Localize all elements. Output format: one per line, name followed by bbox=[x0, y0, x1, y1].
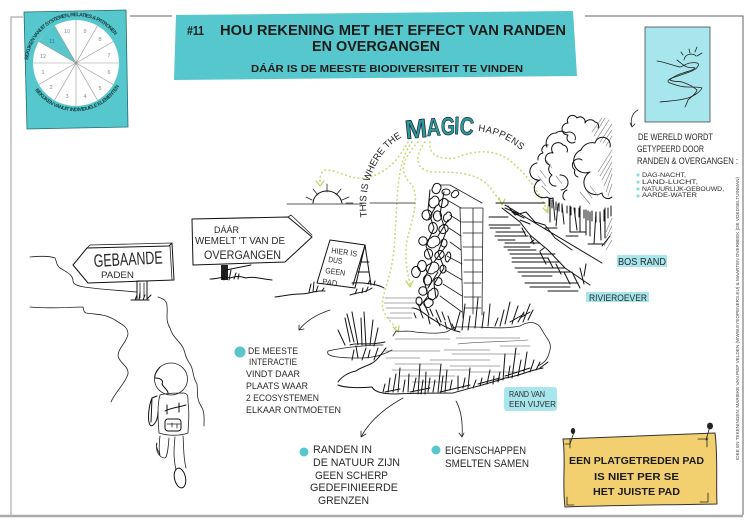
ivy leaves bbox=[412, 183, 459, 308]
label: rand van een vijver: EEN VIJVER bbox=[509, 399, 556, 409]
magic: M bbox=[404, 114, 429, 145]
credits: IDEE EN TEKENINGEN: MARIEKE VAN PIEP VELDEN (WWW.EYEOPENERS.EU) & MAARTEN OVERBEEK (DE VOEDSELTUINMAN) bbox=[735, 177, 740, 460]
arrow: to eigenschappen text bbox=[456, 401, 464, 437]
sign: gebaande paden bbox=[73, 243, 174, 300]
pond grasses bbox=[338, 348, 543, 394]
wheel numbers: 7 bbox=[107, 53, 111, 59]
text block: interactie bbox=[234, 346, 341, 415]
dotted arrows from magic bbox=[316, 142, 548, 332]
text block: interactie: ELKAAR ONTMOETEN bbox=[246, 405, 341, 415]
wheel numbers bbox=[40, 29, 111, 100]
sign: daar wemelt het: OVERGANGEN bbox=[204, 248, 281, 262]
sign: hier is dus geen pad: DUS bbox=[328, 255, 343, 266]
panel: title banner: HOU REKENING MET HET EFFECT VAN RANDEN bbox=[220, 23, 566, 39]
hatching bbox=[592, 118, 612, 250]
wheel numbers: 9 bbox=[83, 29, 87, 35]
magic: I bbox=[454, 112, 460, 140]
labels on landscape bbox=[504, 255, 667, 411]
wheel numbers: 5 bbox=[98, 86, 102, 92]
wheel numbers: 8 bbox=[98, 37, 102, 43]
panel: wheel of principles: BEKIJKEN VANUIT INDIVIDUELE ELEMENTEN bbox=[35, 84, 119, 112]
text block: interactie: PLAATS WAAR bbox=[246, 381, 308, 391]
heading: #11 bbox=[187, 23, 204, 38]
wheel numbers: 2 bbox=[49, 85, 53, 91]
wheel numbers: 11 bbox=[49, 39, 55, 45]
wheel numbers: 10 bbox=[64, 29, 70, 35]
text block: interactie: INTERACTIE bbox=[249, 357, 297, 367]
wheel numbers: 1 bbox=[41, 70, 45, 76]
text: de wereld wordt bbox=[636, 132, 738, 199]
text block: eigenschappen bbox=[432, 445, 529, 470]
wheel numbers: 4 bbox=[83, 94, 87, 100]
magic heading bbox=[360, 112, 524, 218]
text block: interactie: DE MEESTE bbox=[248, 346, 298, 356]
text block: eigenschappen: EIGENSCHAPPEN bbox=[445, 445, 526, 457]
callout: yellow note: IS NIET PER SE bbox=[594, 471, 679, 483]
canopy bbox=[530, 115, 612, 200]
pond bbox=[328, 298, 550, 394]
list of transitions: DAG-NACHT, bbox=[642, 172, 686, 179]
sign: daar wemelt het: DÁÁR bbox=[214, 225, 239, 235]
label: rand van een vijver: RAND VAN bbox=[509, 389, 545, 399]
trunks bbox=[550, 198, 605, 244]
text block: randen in de natuur: GRENZEN bbox=[318, 495, 369, 507]
panel: title banner bbox=[174, 11, 577, 80]
panel: wheel of principles bbox=[24, 10, 128, 130]
sign: hier is dus geen pad: HIER IS bbox=[331, 246, 358, 259]
text block: randen in de natuur: DE NATUUR ZIJN bbox=[313, 457, 400, 469]
text block: eigenschappen: SMELTEN SAMEN bbox=[445, 458, 529, 470]
path lines and walker bbox=[30, 256, 204, 489]
magic: C bbox=[458, 112, 475, 141]
subtitle: DÁÁR IS DE MEESTE BIODIVERSITEIT TE VINDEN bbox=[251, 62, 523, 75]
text block: interactie: VINDT DAAR bbox=[246, 369, 300, 379]
list of transitions: AARDE-WATER bbox=[642, 192, 698, 199]
water lines bbox=[489, 217, 578, 291]
wheel captions: BEKIJKEN VANUIT SYSTEMEN, RELATIES & PATRONEN bbox=[24, 12, 118, 60]
callout: yellow note: HET JUISTE PAD bbox=[593, 486, 680, 498]
sign: hier is dus geen pad: PAD bbox=[322, 277, 338, 288]
label: bos rand: BOS RAND bbox=[618, 256, 666, 268]
sign: hier is dus geen pad bbox=[275, 240, 384, 297]
arrow: to interactie text bbox=[299, 310, 330, 330]
sign: daar wemelt het: WEMELT 'T VAN DE bbox=[195, 236, 285, 247]
text block: randen in de natuur bbox=[300, 444, 400, 507]
text block: randen in de natuur: RANDEN IN bbox=[313, 444, 372, 456]
panel: title banner: EN OVERGANGEN bbox=[312, 39, 440, 55]
ivy covered wall bbox=[412, 183, 483, 332]
pins bbox=[570, 426, 710, 444]
callout text: EEN PLATGETREDEN PAD bbox=[569, 455, 704, 467]
walker bbox=[149, 363, 189, 489]
arrow to card text bbox=[630, 110, 638, 127]
sign: hier is dus geen pad: GEEN bbox=[325, 266, 346, 278]
list of transitions bbox=[636, 172, 724, 199]
highlighted segment 11 bbox=[39, 26, 76, 63]
sign: daar wemelt het bbox=[192, 215, 312, 280]
this is where the: THIS IS WHERE THE bbox=[360, 132, 402, 218]
card: river illustration bbox=[645, 27, 710, 122]
sign: gebaande paden: PADEN bbox=[101, 270, 134, 280]
forest edge bbox=[530, 115, 612, 250]
magic: A bbox=[426, 113, 441, 142]
label: rand van een vijver bbox=[504, 387, 557, 411]
sun on the horizon bbox=[287, 184, 415, 204]
arrow: to randen text bbox=[361, 398, 403, 437]
wheel numbers: 12 bbox=[40, 54, 46, 60]
magic bbox=[404, 112, 475, 145]
wheel numbers: 6 bbox=[107, 70, 111, 76]
text: de wereld wordt: DE WERELD WORDT bbox=[638, 132, 713, 143]
text block: randen in de natuur: GEDEFINIEERDE bbox=[310, 482, 398, 494]
text: de wereld wordt: GETYPEERD DOOR bbox=[637, 144, 704, 155]
wheel numbers: 3 bbox=[65, 94, 69, 100]
happens: HAPPENS bbox=[478, 124, 524, 150]
magic: G bbox=[441, 113, 455, 141]
text block: interactie: 2 ECOSYSTEMEN bbox=[246, 393, 319, 403]
callout: yellow note bbox=[563, 423, 717, 507]
list of transitions: LAND-LUCHT, bbox=[642, 179, 698, 186]
sign: gebaande paden: GEBAANDE bbox=[93, 247, 163, 271]
text block: randen in de natuur: GEEN SCHERP bbox=[315, 470, 388, 482]
river bank bbox=[489, 203, 602, 291]
list of transitions: NATUURLIJK-GEBOUWD, bbox=[642, 186, 724, 193]
label: rivieroever: RIVIEROEVER bbox=[589, 293, 647, 303]
